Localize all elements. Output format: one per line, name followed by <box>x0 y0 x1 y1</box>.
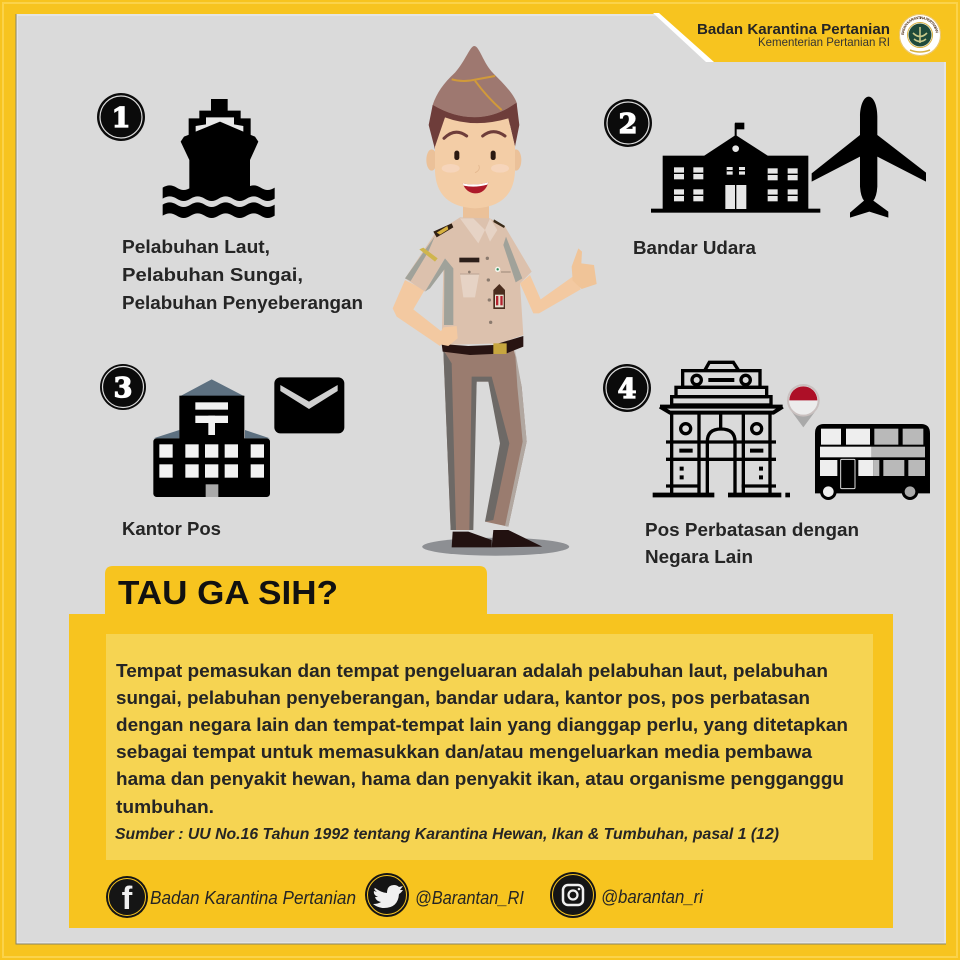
cap <box>433 46 517 117</box>
ministry name: Kementerian Pertanian RI <box>758 35 890 49</box>
icon: double-decker bus <box>815 424 930 500</box>
label: border posts: Pos Perbatasan dengan <box>645 519 859 540</box>
number badge 3: 3 <box>114 373 132 404</box>
number badge 4: 4 <box>618 374 636 405</box>
icon: border gate <box>653 362 790 495</box>
header: organisation name and logo <box>697 14 941 56</box>
number badge 2: 2 <box>619 109 637 140</box>
main text: sungai, pelabuhan penyeberangan, bandar udara, kantor pos, pos perbatasan <box>116 687 810 708</box>
label: ports: Pelabuhan Laut, <box>122 236 270 257</box>
main text <box>116 660 848 817</box>
logo <box>899 14 941 56</box>
icon: facebook <box>106 876 148 918</box>
icon: twitter <box>365 873 409 917</box>
face <box>435 117 515 208</box>
icon: envelope <box>274 377 344 433</box>
number badge 1: 1 <box>112 103 130 134</box>
panel: tau ga sih <box>69 566 893 928</box>
icon: instagram <box>550 872 596 918</box>
number badge 4 <box>603 364 651 412</box>
label: ports: Pelabuhan Sungai, <box>122 264 303 285</box>
heading: TAU GA SIH? <box>118 574 338 611</box>
main text: sebagai tempat untuk memasukkan dan/atau mengeluarkan media pembawa <box>116 741 813 762</box>
label: border posts: Negara Lain <box>645 546 753 567</box>
inner text box <box>106 634 873 860</box>
main text: hama dan penyakit hewan, hama dan penyakit ikan, atau organisme pengganggu <box>116 768 844 789</box>
item 1: sea ports <box>97 93 363 313</box>
item 2: airport <box>604 97 926 258</box>
thumbs-up hand <box>572 248 597 289</box>
icon: ship <box>163 99 275 218</box>
icon: facebook: f <box>122 880 133 916</box>
label: ports <box>122 236 363 313</box>
number badge 2 <box>604 99 652 147</box>
main text: tumbuhan. <box>116 796 214 817</box>
trousers <box>443 347 527 530</box>
logo: BADAN KARANTINA PERTANIAN <box>901 16 938 35</box>
twitter handle: @Barantan_RI <box>415 888 524 908</box>
social links <box>106 872 704 918</box>
label: post office: Kantor Pos <box>122 518 221 539</box>
hair back <box>429 103 519 149</box>
icon: airplane <box>812 97 926 218</box>
ground shadow <box>422 538 569 556</box>
number badge 1 <box>97 93 145 141</box>
instagram handle: @barantan_ri <box>601 887 704 907</box>
character: quarantine officer <box>393 46 597 556</box>
heading tab <box>105 566 487 616</box>
main text: dengan negara lain dan tempat-tempat lain yang dianggap perlu, yang ditetapkan <box>116 714 848 735</box>
belt and buckle <box>442 336 523 355</box>
item 3: post office <box>100 364 344 539</box>
item 4: land border posts <box>603 362 930 567</box>
number badge 3 <box>100 364 146 410</box>
left arm <box>393 280 446 346</box>
source line: Sumber : UU No.16 Tahun 1992 tentang Karantina Hewan, Ikan & Tumbuhan, pasal 1 (12) <box>115 826 779 843</box>
neck <box>463 205 489 223</box>
label: border posts <box>645 519 859 567</box>
main text: Tempat pemasukan dan tempat pengeluaran adalah pelabuhan laut, pelabuhan <box>116 660 828 681</box>
icon: terminal building <box>651 123 820 213</box>
shirt <box>405 217 532 345</box>
label: airport: Bandar Udara <box>633 237 757 258</box>
label: ports: Pelabuhan Penyeberangan <box>122 292 363 313</box>
right arm <box>520 275 581 313</box>
shoes <box>452 530 542 547</box>
organisation name: Badan Karantina Pertanian <box>697 22 890 38</box>
icon: post office building <box>153 379 270 497</box>
icon: Indonesia map pin <box>787 384 820 427</box>
panel body <box>69 614 893 928</box>
head <box>426 46 521 208</box>
left hand on hip <box>436 326 458 346</box>
facebook handle: Badan Karantina Pertanian <box>150 888 356 908</box>
